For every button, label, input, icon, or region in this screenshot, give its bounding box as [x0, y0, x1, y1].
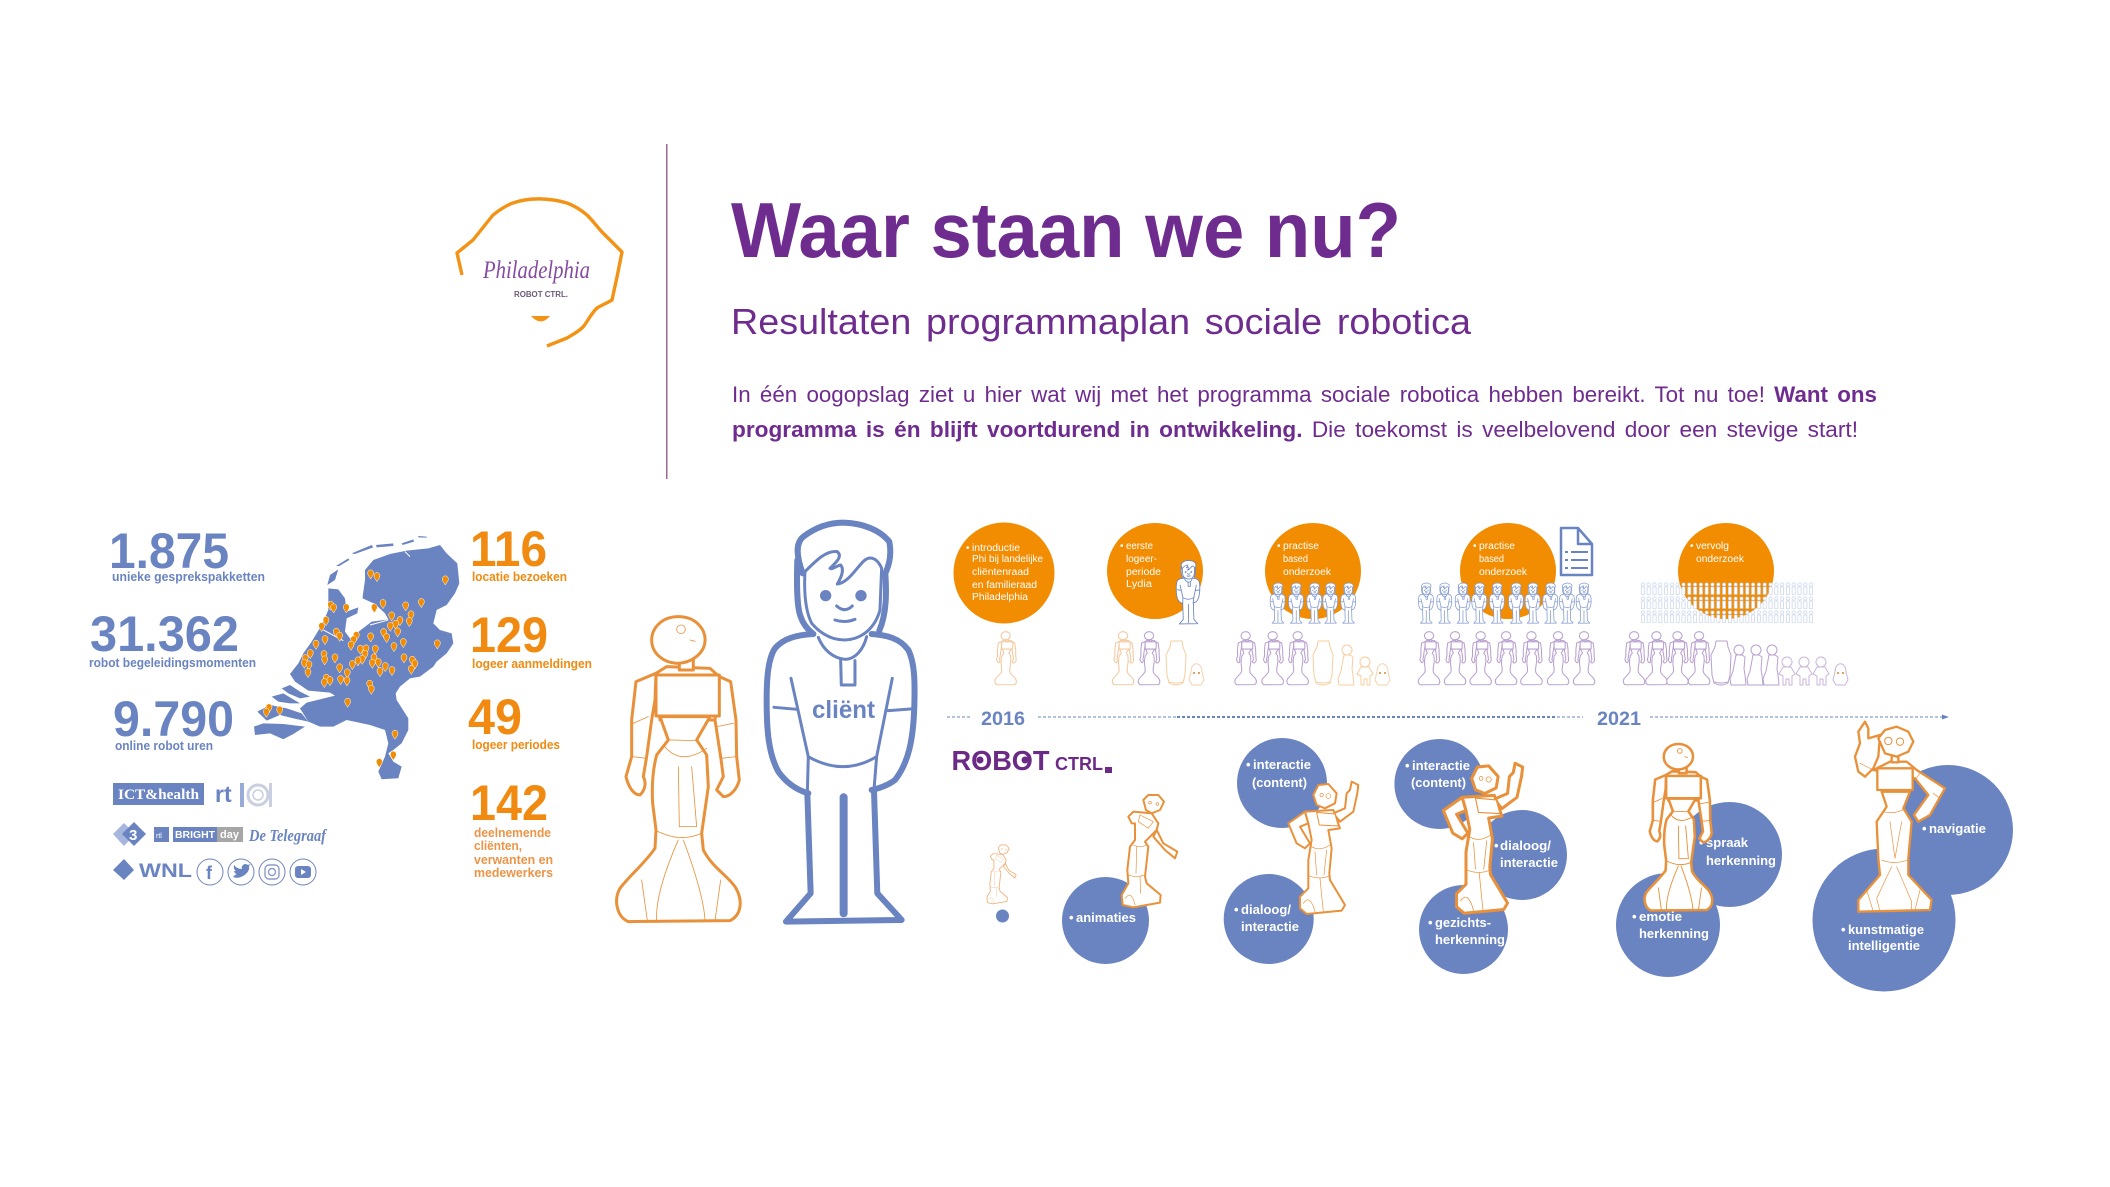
location pins [263, 570, 448, 768]
milestone 1: introductie: en familieraad [972, 580, 1037, 591]
milestone 4: practise based onderzoek: • [1473, 541, 1477, 552]
stage 3: interactie, dialoog, gezichtsherkenning: gezichts- [1435, 915, 1491, 930]
stats: right orange numbers: logeer aanmeldingen [472, 657, 592, 671]
stage 3: interactie, dialoog, gezichtsherkenning: • [1405, 758, 1410, 773]
stage 2: interactie and dialoog: interactie [1241, 919, 1299, 934]
stage 2: interactie and dialoog: • [1246, 757, 1251, 772]
stats: right orange numbers: cliënten, [474, 839, 522, 853]
stage 3: interactie, dialoog, gezichtsherkenning [1394, 739, 1567, 974]
icon: facebook [197, 859, 223, 885]
stats: left blue numbers [89, 523, 265, 753]
stage 4: spraak- en emotieherkenning: herkenning [1706, 853, 1776, 868]
intro text [732, 382, 1877, 442]
milestone 5: vervolg onderzoek: onderzoek [1696, 554, 1745, 565]
milestone 4: practise based onderzoek [1418, 523, 1595, 685]
milestone 2: eerste logeerperiode [1107, 523, 1204, 685]
stage 4: spraak- en emotieherkenning: spraak [1706, 835, 1749, 850]
milestone 1: introductie: • [966, 543, 970, 554]
stage 5: navigatie en kunstmatige intelligentie [1812, 722, 2013, 992]
stats: right orange numbers: locatie bezoeken [472, 570, 567, 584]
milestone 3: practise based onderzoek [1235, 523, 1390, 685]
icon: twitter [228, 859, 254, 885]
stats: right orange numbers: 49 [468, 689, 522, 745]
icon: instagram [259, 859, 285, 885]
milestone 2: eerste logeerperiode: logeer- [1126, 554, 1157, 565]
milestone 3: practise based onderzoek: based [1283, 554, 1308, 565]
logo: ROBOT CTRL [952, 745, 1112, 776]
milestone 4: practise based onderzoek: based [1479, 554, 1504, 565]
label: cliënt: cliënt [812, 696, 876, 724]
logo: NPO WNL [113, 859, 192, 882]
stage 2: interactie and dialoog: dialoog/ [1241, 902, 1291, 917]
logo: RTL Bright Day [154, 827, 243, 842]
logo: RTL Bright Day: day [220, 829, 240, 841]
icon: facebook: f [206, 863, 213, 883]
stage 3: interactie, dialoog, gezichtsherkenning: interactie [1500, 855, 1558, 870]
stage 2: interactie and dialoog: interactie [1253, 757, 1311, 772]
arrow head [1942, 714, 1949, 720]
stage 1: animaties: • [1069, 910, 1074, 925]
stats: left blue numbers: 1.875 [109, 523, 229, 579]
icon: document [1561, 528, 1592, 575]
map: Netherlands with location pins [254, 536, 459, 779]
logo: NPO 3 [113, 822, 146, 846]
milestone 3: practise based onderzoek: practise [1283, 541, 1319, 552]
stage 5: navigatie en kunstmatige intelligentie: • [1922, 821, 1927, 836]
milestone 5: vervolg onderzoek: vervolg [1696, 541, 1729, 552]
stats: left blue numbers: 31.362 [90, 606, 239, 662]
stage 4: spraak- en emotieherkenning: • [1632, 909, 1637, 924]
stage 4: spraak- en emotieherkenning: herkenning [1639, 926, 1709, 941]
logo: De Telegraaf: De Telegraaf [248, 826, 328, 845]
stage 0: robot with dot [987, 845, 1016, 922]
logo: rtl: rt [215, 781, 232, 807]
year 2016: 2016 [981, 709, 1025, 730]
year 2021: 2021 [1597, 709, 1641, 730]
stage 5: navigatie en kunstmatige intelligentie: • [1841, 922, 1846, 937]
stats: left blue numbers: unieke gesprekspakketten [112, 570, 265, 584]
logo: RTL Bright Day: rtl [156, 833, 162, 840]
milestone 1: introductie: introductie [972, 543, 1020, 554]
media logos [113, 781, 328, 885]
timeline [947, 709, 1949, 730]
milestone 3: practise based onderzoek: onderzoek [1283, 567, 1332, 578]
icon: youtube [290, 859, 316, 885]
logo: ICT&health [113, 783, 204, 805]
divider line [666, 144, 668, 479]
milestone 5: vervolg onderzoek [1623, 523, 1848, 685]
logo: Philadelphia robot ctrl: ROBOT CTRL. [514, 290, 568, 299]
stats: right orange numbers: 129 [470, 607, 548, 663]
milestone 2: eerste logeerperiode: Lydia [1126, 579, 1152, 590]
milestone 5: vervolg onderzoek: • [1690, 541, 1694, 552]
stats: right orange numbers: logeer periodes [472, 738, 560, 752]
stage 5: navigatie en kunstmatige intelligentie: kunstmatige [1848, 922, 1924, 937]
stage 3: interactie, dialoog, gezichtsherkenning: interactie [1412, 758, 1470, 773]
logo: NPO 3: 3 [129, 827, 137, 844]
stage 2: interactie and dialoog [1224, 738, 1358, 964]
stage 3: interactie, dialoog, gezichtsherkenning: • [1494, 838, 1499, 853]
stage 1: animaties [1062, 795, 1177, 964]
stage 3: interactie, dialoog, gezichtsherkenning: • [1428, 915, 1433, 930]
stage 4: spraak- en emotieherkenning [1616, 744, 1782, 977]
logo: ROBOT CTRL: ROBOT [952, 745, 1050, 776]
stage 2: interactie and dialoog: (content) [1252, 775, 1307, 790]
stage 3: interactie, dialoog, gezichtsherkenning: (content) [1411, 775, 1466, 790]
stage 5: navigatie en kunstmatige intelligentie: intelligentie [1848, 938, 1920, 953]
top row: research milestones [954, 522, 1848, 685]
bottom row: robot capabilities [987, 722, 2013, 992]
logo: ICT&health: ICT&health [118, 787, 200, 803]
logo: ROBOT CTRL: CTRL [1055, 754, 1103, 774]
stage 1: animaties: animaties [1076, 910, 1136, 925]
logo: NPO WNL: WNL [139, 861, 192, 882]
stats: left blue numbers: robot begeleidingsmomenten [89, 656, 256, 670]
stage 2: interactie and dialoog: • [1234, 902, 1239, 917]
milestone 1: introductie [954, 522, 1054, 685]
stage 4: spraak- en emotieherkenning: emotie [1639, 909, 1682, 924]
stage 3: interactie, dialoog, gezichtsherkenning: dialoog/ [1500, 838, 1551, 853]
intro text: In één oogopslag ziet u hier wat wij met het programma sociale robotica hebben bereikt. Tot nu toe! Want ons [732, 382, 1877, 407]
stats: right orange numbers: 116 [470, 521, 547, 577]
intro text: programma is én blijft voortdurend in ontwikkeling. Die toekomst is veelbelovend door een stevige start! [732, 417, 1858, 442]
logo: Philadelphia robot ctrl [457, 199, 622, 346]
stats: right orange numbers: verwanten en [474, 853, 553, 867]
milestone 1: introductie: Philadelphia [972, 592, 1028, 603]
milestone 1: introductie: cliëntenraad [972, 567, 1029, 578]
stage 4: spraak- en emotieherkenning: • [1699, 835, 1704, 850]
stats: right orange numbers: deelnemende [474, 826, 551, 840]
milestone 2: eerste logeerperiode: • [1120, 541, 1124, 552]
milestone 2: eerste logeerperiode: eerste [1126, 541, 1153, 552]
stats: right orange numbers: 142 [470, 775, 548, 831]
milestone 3: practise based onderzoek: • [1277, 541, 1281, 552]
milestone 1: introductie: Phi bij landelijke [972, 554, 1043, 565]
logo: RTL Bright Day: BRIGHT [175, 829, 216, 841]
stats: left blue numbers: online robot uren [115, 739, 213, 753]
milestone 2: eerste logeerperiode: periode [1126, 567, 1161, 578]
subtitle: Resultaten programmaplan sociale robotica [731, 301, 1472, 342]
stage 5: navigatie en kunstmatige intelligentie: navigatie [1929, 821, 1986, 836]
stats: right orange numbers: medewerkers [474, 866, 553, 880]
milestone 4: practise based onderzoek: practise [1479, 541, 1515, 552]
stats: left blue numbers: 9.790 [113, 691, 234, 747]
large robot [617, 617, 740, 922]
stage 3: interactie, dialoog, gezichtsherkenning: herkenning [1435, 932, 1505, 947]
milestone 4: practise based onderzoek: onderzoek [1479, 567, 1528, 578]
logo: rtl [215, 781, 272, 807]
stats: right orange numbers [468, 521, 592, 880]
logo: Philadelphia robot ctrl: Philadelphia [482, 257, 590, 284]
large client figure [767, 523, 915, 922]
title: Waar staan we nu? [731, 186, 1401, 274]
